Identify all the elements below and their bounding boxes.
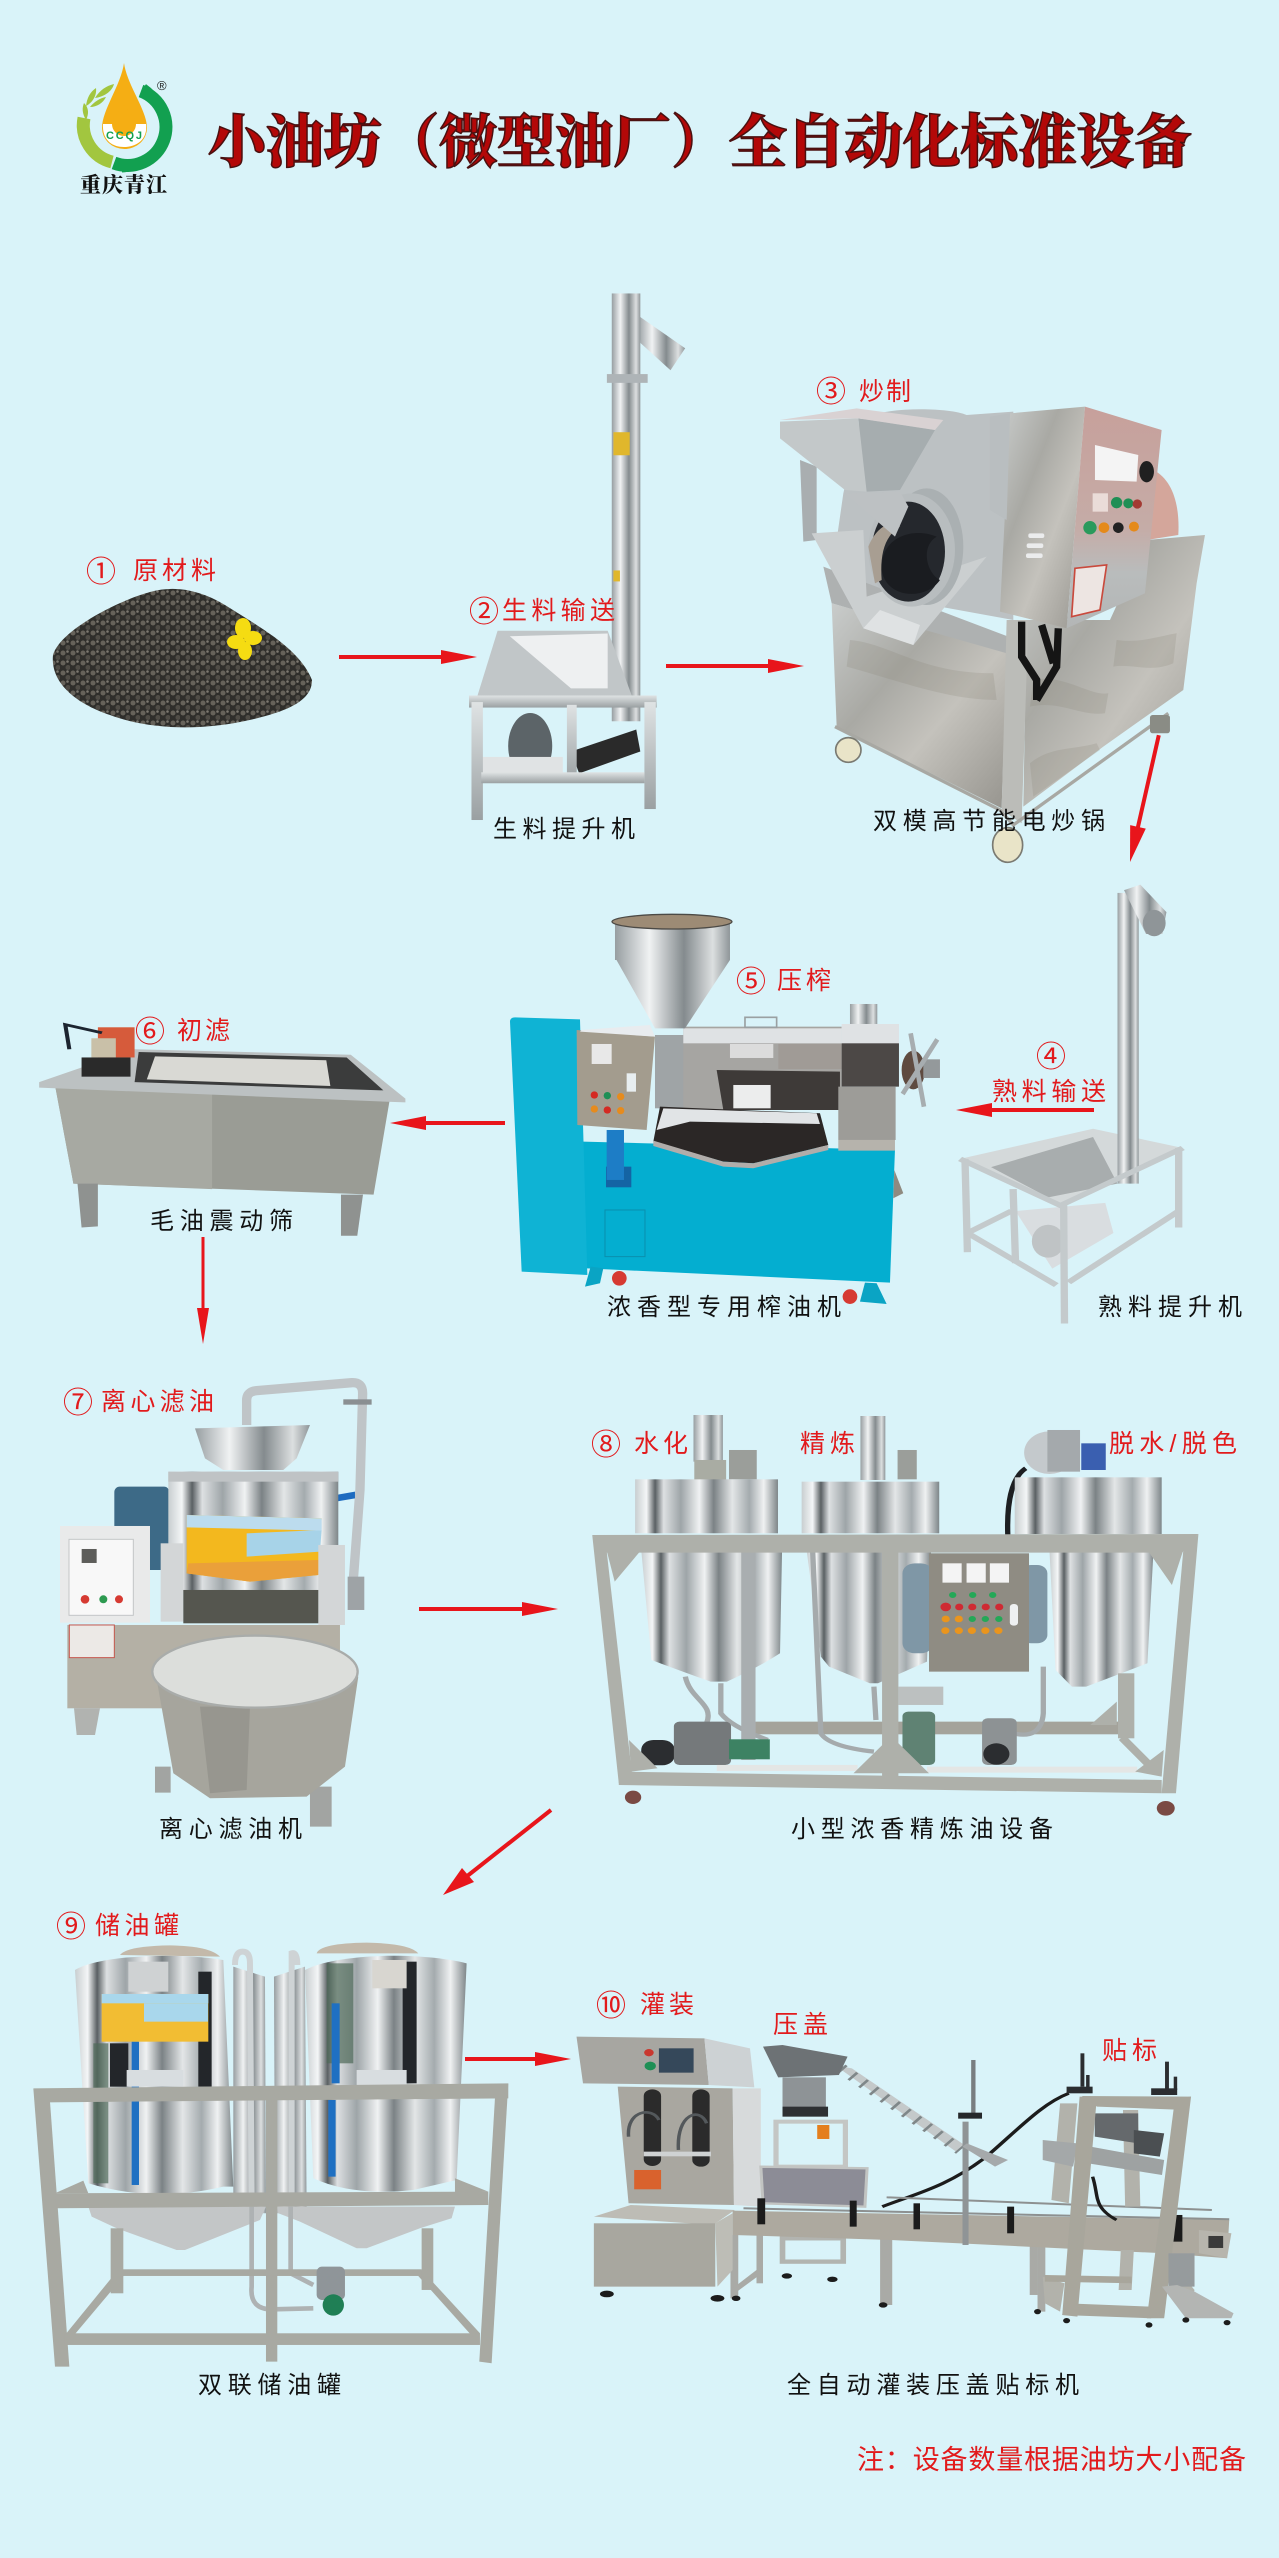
machine: small fragrant refining unit xyxy=(592,1415,1198,1816)
machine: raw material lifter xyxy=(469,293,685,820)
machine: roasted material lifter xyxy=(960,885,1183,1323)
arrow 2 to 3 xyxy=(666,659,804,673)
machine: centrifugal oil filter xyxy=(60,1383,372,1827)
raw material: rapeseed pile xyxy=(53,589,312,727)
label: step 10 filling: 灌装 xyxy=(640,1991,694,2019)
arrow 4 to 5 xyxy=(956,1103,1094,1117)
logo wordmark: 重庆青江 xyxy=(80,173,167,197)
label: step 3 xyxy=(816,376,911,409)
title: 小油坊（微型油厂）全自动化标准设备 xyxy=(208,110,1192,175)
label: step 4: ④ xyxy=(1036,1041,1066,1074)
label: step 10 filling xyxy=(596,1990,694,2023)
note: 注：设备数量根据油坊大小配备 xyxy=(857,2445,1246,2475)
label: step 7: ⑦ xyxy=(63,1387,93,1420)
caption: refining unit: 小型浓香精炼油设备 xyxy=(791,1816,1053,1843)
caption: oil press: 浓香型专用榨油机 xyxy=(607,1294,841,1321)
arrow 6 to 7 xyxy=(197,1237,209,1344)
arrow 7 to 8 xyxy=(419,1602,558,1616)
label: step 5: 压榨 xyxy=(777,967,831,995)
label: step 3: 炒制 xyxy=(859,378,911,406)
arrow 8 to 9 xyxy=(443,1810,551,1895)
label: step 3: ③ xyxy=(816,376,846,409)
logo: Chongqing Qingjiang xyxy=(83,63,167,169)
label: step 4: 熟料输送 xyxy=(992,1078,1106,1106)
label: step 9: 储油罐 xyxy=(95,1912,179,1940)
label: step 2: ② xyxy=(469,596,499,629)
label: step 6: ⑥ xyxy=(135,1016,165,1049)
machine: dual mode roaster xyxy=(780,407,1205,862)
label: step 6: 初滤 xyxy=(177,1017,230,1045)
label: step 4 xyxy=(992,1041,1106,1106)
label: step 8 water and refining stages: 精炼 xyxy=(800,1430,855,1458)
label: step 1: 原材料 xyxy=(133,557,216,585)
caption: raw material lifter: 生料提升机 xyxy=(493,816,635,843)
logo: Chongqing Qingjiang: ® xyxy=(157,78,167,93)
label: step 5: ⑤ xyxy=(736,966,766,999)
label: step 1: ① xyxy=(86,556,116,589)
label: step 8 water and refining stages: ⑧ xyxy=(591,1429,621,1462)
caption: vibrating screen: 毛油震动筛 xyxy=(150,1208,293,1235)
caption: twin tanks: 双联储油罐 xyxy=(198,2372,341,2399)
arrow 3 to 4 xyxy=(1122,733,1167,864)
machine: automatic filling, capping and labelling line xyxy=(577,2037,1234,2328)
arrow 1 to 2 xyxy=(339,650,477,664)
machine: fragrant oil press xyxy=(510,914,940,1304)
label: step 7: 离心滤油 xyxy=(101,1388,214,1416)
caption: filling line: 全自动灌装压盖贴标机 xyxy=(787,2372,1079,2399)
label: step 2: 生料输送 xyxy=(502,597,615,625)
label: step 7 xyxy=(63,1387,214,1420)
label: labelling: 贴标 xyxy=(1102,2037,1157,2065)
label: step 8 water and refining stages xyxy=(591,1429,1237,1462)
caption: centrifugal filter: 离心滤油机 xyxy=(159,1816,302,1843)
label: step 9: ⑨ xyxy=(56,1911,86,1944)
label: step 10 filling: ⑩ xyxy=(596,1990,626,2023)
machine: crude oil vibrating screen xyxy=(39,1025,405,1236)
caption: roaster: 双模高节能电炒锅 xyxy=(873,808,1105,835)
arrow 5 to 6 xyxy=(390,1116,505,1130)
label: step 2 xyxy=(469,596,615,629)
label: step 5 xyxy=(736,966,831,999)
logo: Chongqing Qingjiang: CCQJ xyxy=(106,130,142,142)
label: step 1 xyxy=(86,556,216,589)
label: capping: 压盖 xyxy=(773,2011,828,2039)
machine: twin storage tanks xyxy=(33,1943,508,2367)
label: step 6 xyxy=(135,1016,230,1049)
label: step 8 water and refining stages: 水化 xyxy=(634,1430,688,1458)
arrow 9 to 10 xyxy=(465,2052,571,2066)
label: step 9 xyxy=(56,1911,179,1944)
caption: roasted lifter: 熟料提升机 xyxy=(1098,1294,1242,1321)
label: step 8 water and refining stages: 脱水/脱色 xyxy=(1109,1430,1237,1458)
